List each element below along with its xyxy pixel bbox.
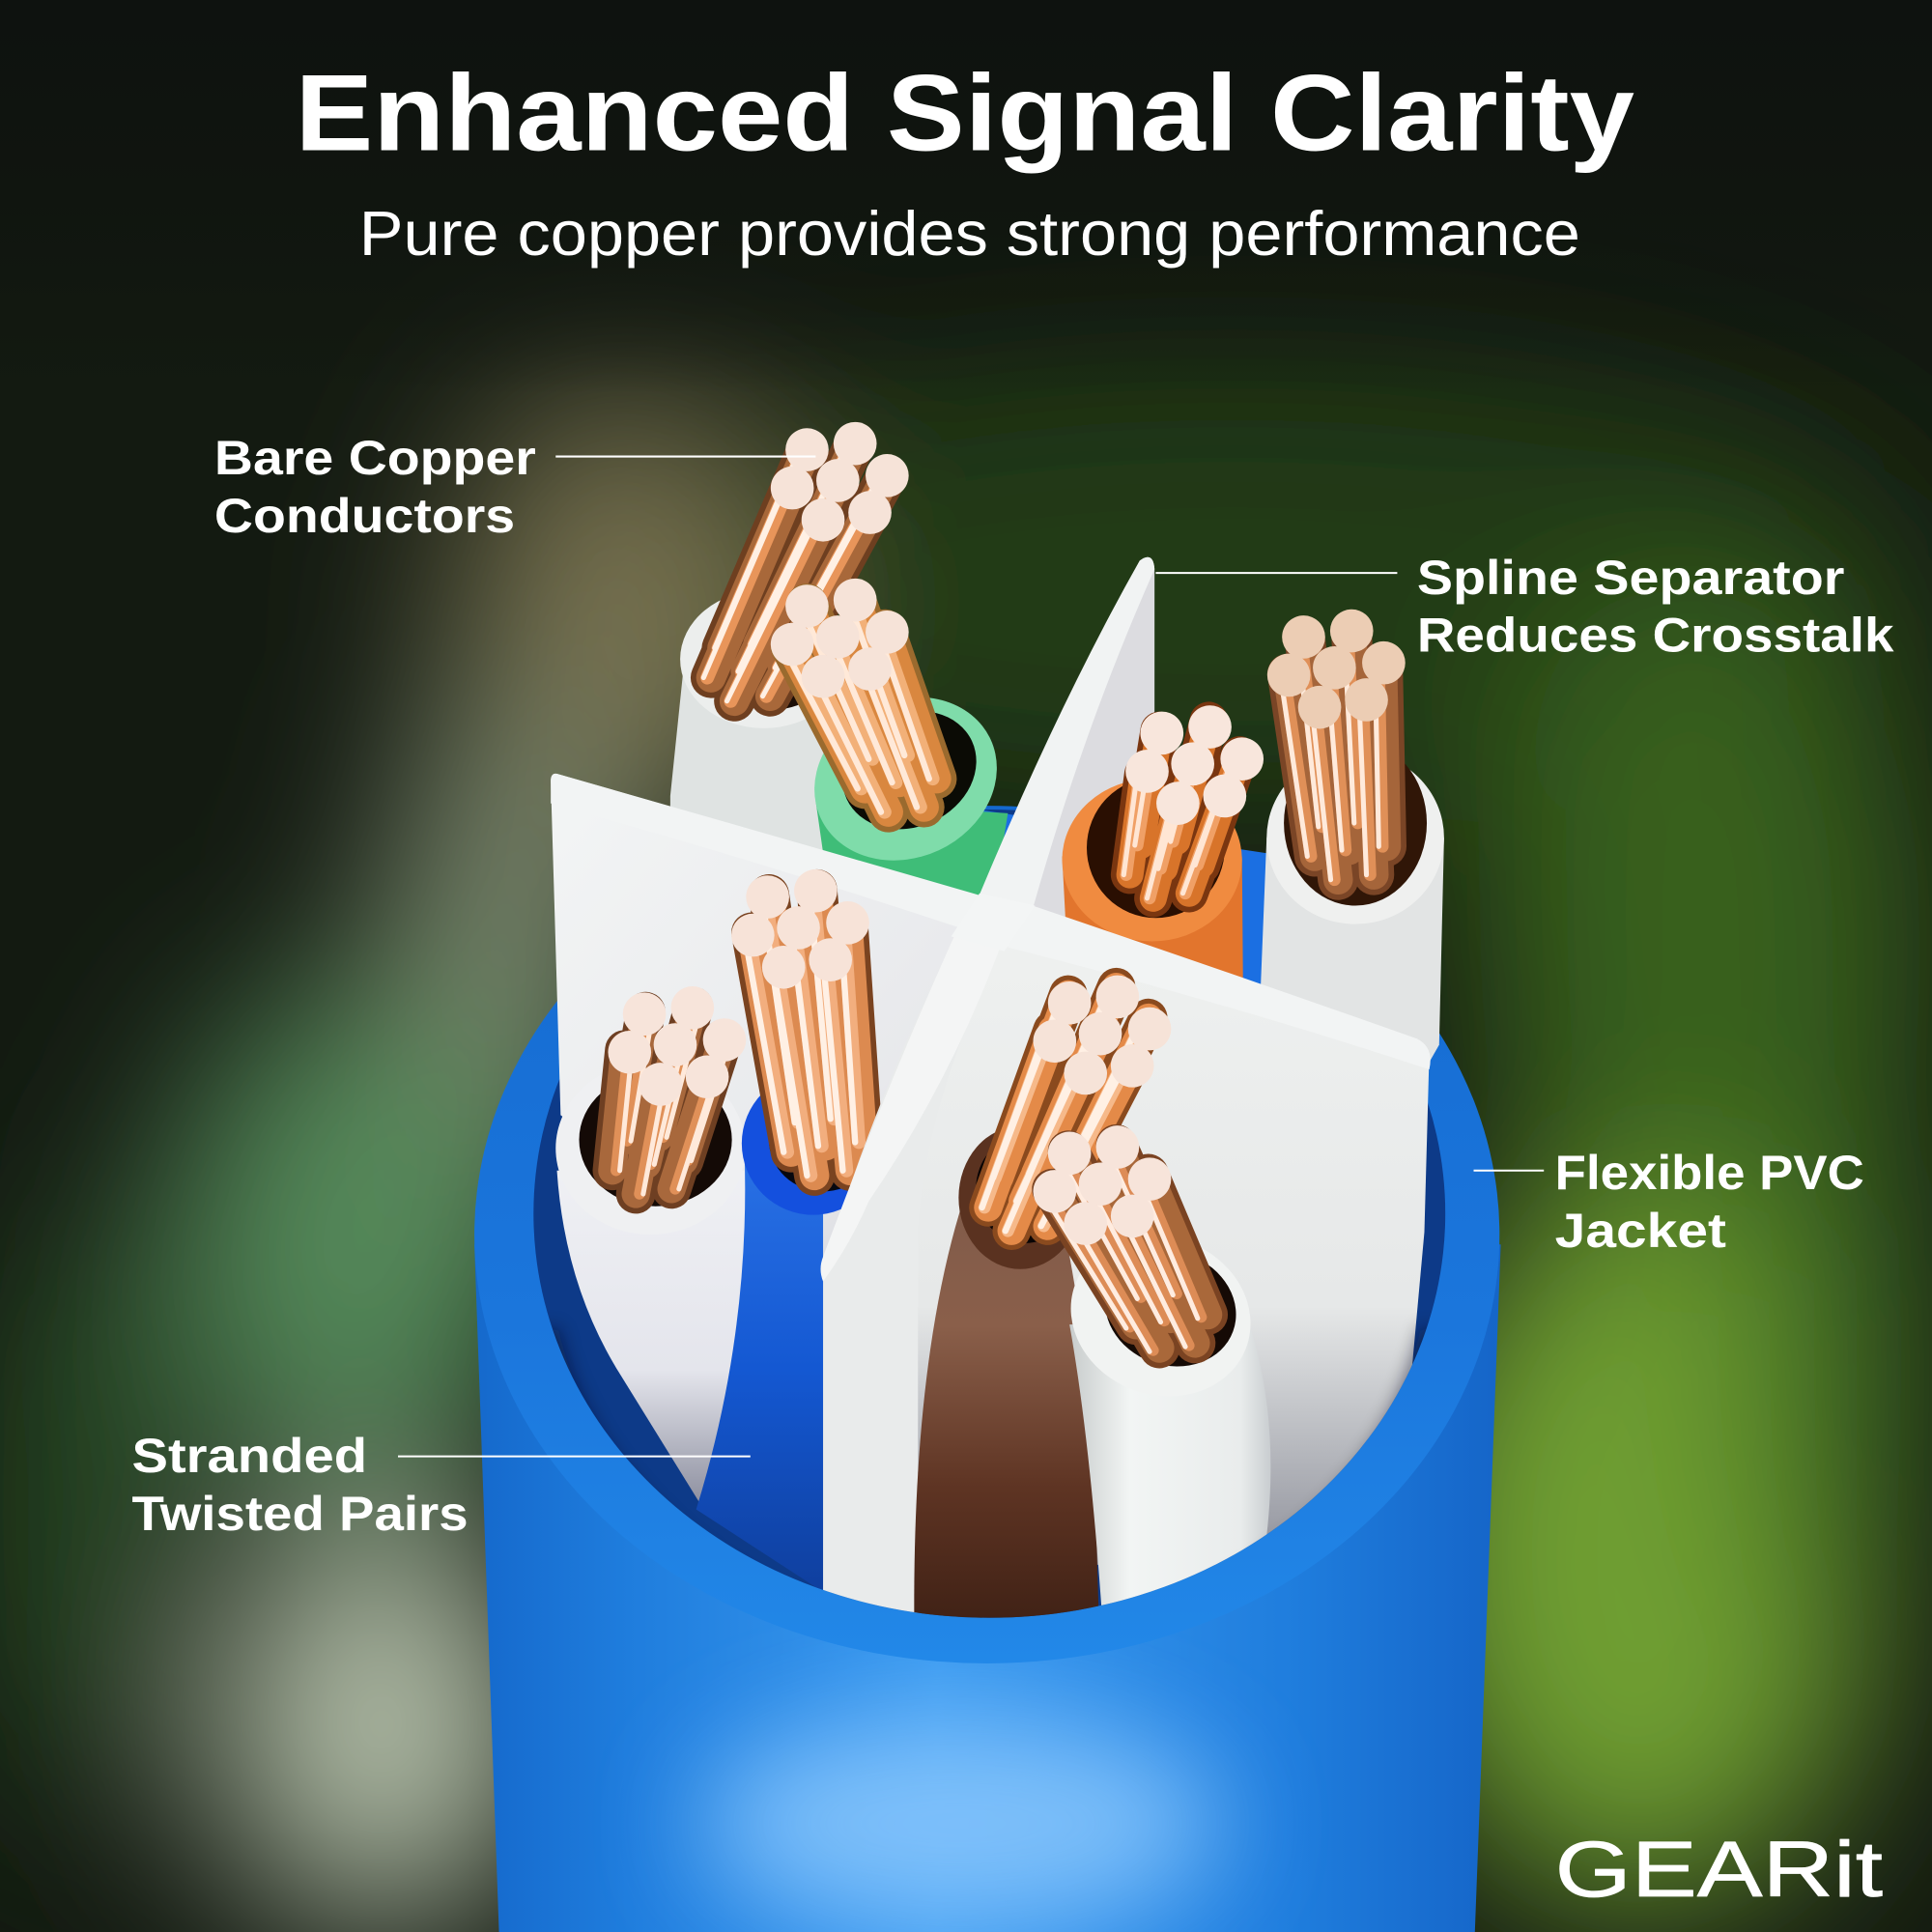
callout: flexible PVC jacket: Flexible PVC (1555, 1146, 1864, 1200)
callout: stranded twisted pairs (131, 1429, 751, 1541)
callout: bare copper conductors: Conductors (214, 489, 515, 543)
callout: bare copper conductors: Bare Copper (214, 431, 536, 485)
callout: stranded twisted pairs: Stranded (131, 1429, 367, 1483)
spline separator: left blade (551, 774, 985, 1269)
subtitle: Pure copper provides strong performance (359, 198, 1580, 269)
wire: white jacket, top left (670, 421, 909, 850)
callout: spline separator: Spline Separator (1417, 551, 1844, 605)
spline separator: right blade (906, 906, 1431, 1565)
wire: white jacket, lower left (555, 986, 747, 1503)
wire: blue jacket (696, 869, 885, 1592)
callout: flexible PVC jacket: Jacket (1555, 1204, 1726, 1258)
spline separator: top blade (980, 556, 1155, 917)
cable: blue PVC jacket (474, 806, 1501, 1932)
callout: spline separator: Reduces Crosstalk (1417, 609, 1894, 663)
cable interior: wires and spline separator (542, 422, 1444, 1657)
wire: green jacket (771, 578, 1009, 895)
wire: white jacket, front (1034, 1125, 1273, 1627)
callout: bare copper conductors (214, 431, 815, 543)
wire: white jacket, top right (1260, 610, 1444, 1062)
callout: flexible PVC jacket (1474, 1146, 1864, 1258)
spline separator: bottom blade (820, 894, 1035, 1627)
callout: spline separator (1155, 551, 1894, 663)
wire: orange jacket (1062, 705, 1264, 1010)
wire: brown jacket (914, 976, 1171, 1627)
title: Enhanced Signal Clarity (295, 52, 1634, 174)
logo: GEARit: GEARit (1555, 1826, 1883, 1914)
callout: stranded twisted pairs: Twisted Pairs (131, 1487, 469, 1541)
